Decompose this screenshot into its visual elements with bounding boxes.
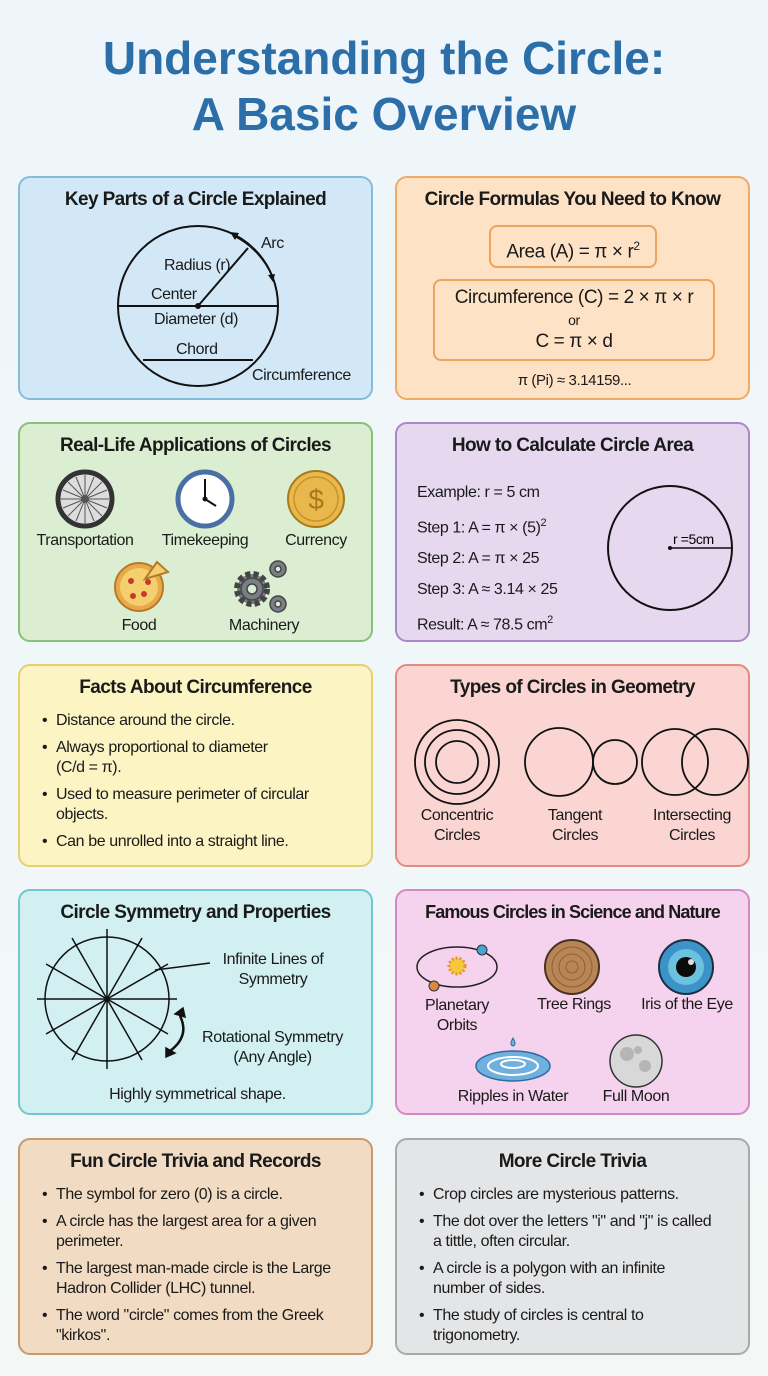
heading: circumference facts: Facts About Circumference <box>79 677 312 698</box>
title: A Basic Overview <box>192 88 576 140</box>
diagram: r=5cm circle <box>607 485 733 611</box>
formula: area <box>489 225 657 268</box>
bullet list: Distance around the circle. <box>56 712 235 729</box>
panel: key parts: Chord <box>176 341 218 358</box>
panel: symmetry <box>18 889 373 1115</box>
panel: key parts: Circumference <box>252 367 351 384</box>
panel: famous circles: Ripples in Water <box>458 1088 568 1105</box>
bullet list: Always proportional to diameter <box>56 739 268 756</box>
panel: applications: Transportation <box>36 532 133 549</box>
panel: famous circles: Planetary <box>425 997 489 1014</box>
bullet list: The word "circle" comes from the Greek "kirkos". <box>56 1307 323 1344</box>
bullet list <box>42 712 309 850</box>
heading: calculate area: How to Calculate Circle Area <box>452 435 693 456</box>
title <box>103 32 665 140</box>
panel: applications: Timekeeping <box>162 532 248 549</box>
panel: fun trivia <box>18 1138 373 1355</box>
panel: types of circles: Circles <box>669 827 715 844</box>
panel: more trivia <box>395 1138 750 1355</box>
diagrams: types <box>414 719 749 805</box>
panel: key parts: Center <box>151 286 197 303</box>
panel: types of circles: Tangent <box>548 807 602 824</box>
icons: applications <box>56 470 345 613</box>
panel: key parts: Diameter (d) <box>154 311 238 328</box>
formula: circumference: or <box>568 312 580 328</box>
panel: key parts <box>18 176 373 400</box>
diagram: symmetry <box>37 929 210 1069</box>
title: Understanding the Circle: <box>103 32 665 84</box>
panel: famous circles: Iris of the Eye <box>641 996 733 1013</box>
panel: symmetry: Rotational Symmetry <box>202 1029 343 1046</box>
panel: types of circles: Intersecting <box>653 807 731 824</box>
panel: types of circles <box>395 664 750 867</box>
heading: symmetry: Circle Symmetry and Properties <box>60 902 331 923</box>
panel: key parts: Radius (r) <box>164 257 230 274</box>
panel: famous circles <box>395 889 750 1115</box>
panel: key parts: Arc <box>261 235 284 252</box>
diagram: r=5cm circle: r =5cm <box>673 531 714 547</box>
formula: circumference: C = π × d <box>535 331 613 352</box>
steps: Step 1: A = π × (5)2 <box>417 517 546 536</box>
formula: area: Area (A) = π × r2 <box>506 239 640 262</box>
panel: types of circles: Concentric <box>421 807 493 824</box>
panel: types of circles: Circles <box>552 827 598 844</box>
bullet list: (C/d = π). <box>56 759 121 776</box>
heading: types: Types of Circles in Geometry <box>450 677 695 698</box>
icons: famous circles <box>416 939 714 1088</box>
bullet list <box>420 1186 711 1344</box>
steps <box>417 484 558 634</box>
panel: applications: Food <box>122 617 156 634</box>
formula: circumference: Circumference (C) = 2 × π × r <box>455 287 693 308</box>
panel: famous circles: Orbits <box>437 1017 477 1034</box>
panel: symmetry: (Any Angle) <box>233 1049 312 1066</box>
bullet list: The symbol for zero (0) is a circle. <box>56 1186 283 1203</box>
panel: applications <box>18 422 373 642</box>
heading: famous circles: Famous Circles in Science and Nature <box>425 902 720 922</box>
bullet list: The study of circles is central to trigonometry. <box>433 1307 644 1344</box>
heading: more trivia: More Circle Trivia <box>499 1151 646 1172</box>
panel: symmetry: Symmetry <box>239 971 307 988</box>
steps: Step 2: A = π × 25 <box>417 550 539 567</box>
pi value: π (Pi) ≈ 3.14159... <box>518 372 631 389</box>
steps: Step 3: A ≈ 3.14 × 25 <box>417 581 558 598</box>
steps: Example: r = 5 cm <box>417 484 540 501</box>
bullet list <box>42 1186 331 1344</box>
bullet list: Can be unrolled into a straight line. <box>56 833 288 850</box>
bullet list: Crop circles are mysterious patterns. <box>433 1186 679 1203</box>
steps: Result: A ≈ 78.5 cm2 <box>417 614 553 634</box>
bullet list: The largest man-made circle is the Large Hadron Collider (LHC) tunnel. <box>56 1260 331 1297</box>
panel: applications: Currency <box>285 532 347 549</box>
panel: symmetry: Infinite Lines of <box>223 951 323 968</box>
diagram: circle parts <box>117 225 279 387</box>
panel: types of circles: Circles <box>434 827 480 844</box>
panel: circumference facts <box>18 664 373 867</box>
bullet list: A circle is a polygon with an infinite number of sides. <box>433 1260 665 1297</box>
heading: key parts: Key Parts of a Circle Explained <box>65 189 326 210</box>
panel: symmetry: Highly symmetrical shape. <box>109 1086 286 1103</box>
heading: fun trivia: Fun Circle Trivia and Records <box>70 1151 321 1172</box>
icons: applications: $ <box>308 484 324 515</box>
bullet list: Used to measure perimeter of circular objects. <box>56 786 309 823</box>
formula: circumference <box>433 279 715 361</box>
panel: famous circles: Full Moon <box>603 1088 669 1105</box>
panel: calculate area <box>395 422 750 642</box>
bullet list: The dot over the letters "i" and "j" is called a tittle, often circular. <box>433 1213 711 1250</box>
panel: formulas <box>395 176 750 400</box>
bullet list: A circle has the largest area for a given perimeter. <box>56 1213 316 1250</box>
panel: famous circles: Tree Rings <box>537 996 611 1013</box>
heading: applications: Real-Life Applications of Circles <box>60 435 331 456</box>
heading: formulas: Circle Formulas You Need to Know <box>425 189 720 210</box>
panel: applications: Machinery <box>229 617 299 634</box>
